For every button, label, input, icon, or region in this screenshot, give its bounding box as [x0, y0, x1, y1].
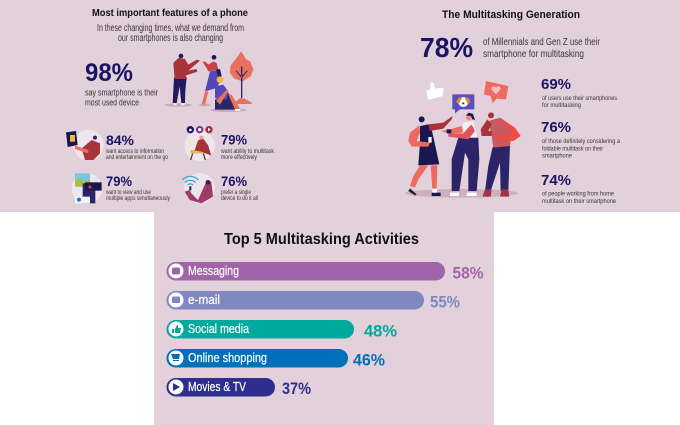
stat: 74%	[541, 172, 616, 205]
heading: features: Most important features of a phone	[92, 7, 248, 19]
bar: online shopping: Online shopping	[188, 350, 267, 365]
panel: the multitasking generation	[405, 9, 620, 205]
heading: generation: The Multitasking Generation	[442, 9, 580, 21]
stat: 69%: 69%	[541, 76, 571, 93]
bar: movies and TV	[166, 378, 311, 398]
stat: 78%: of Millennials and Gen Z use their	[483, 36, 600, 48]
bar: e-mail	[166, 291, 460, 312]
bar: social media	[166, 320, 397, 340]
panel: most important features of a phone	[66, 7, 275, 204]
stat: 79% ability: want ability to multitask	[220, 149, 275, 155]
top background panel	[0, 0, 680, 212]
bar: online shopping: 46%	[353, 351, 385, 369]
bar: messaging	[166, 262, 484, 283]
stat: 79% apps	[72, 173, 170, 204]
stat: 79% apps: multiple apps simultaneously	[106, 196, 170, 202]
bar: e-mail: 55%	[430, 294, 460, 312]
intro text: our smartphones is also changing	[118, 33, 223, 44]
woman with ponytail	[441, 113, 479, 196]
illustration: friends and tree	[164, 51, 253, 112]
panel: top 5 multitasking activities	[166, 231, 484, 398]
stat: 79% ability: more effectively	[221, 155, 257, 161]
icon: thumbs up	[426, 82, 443, 100]
icon: dog bubble	[452, 94, 474, 113]
stat: 69%	[541, 76, 618, 109]
bar: e-mail: e-mail	[188, 292, 220, 307]
stat: 79% apps: want to view and use	[105, 190, 152, 196]
stat: 79% apps: 79%	[106, 173, 133, 189]
bottom background panel	[154, 212, 494, 425]
stat: 74%: multitask on their smartphone	[542, 198, 616, 205]
stat: 69%: of users use their smartphones	[542, 95, 618, 102]
stat: 76% device: 76%	[221, 173, 248, 189]
stat: 84%: and entertainment on the go	[106, 155, 169, 161]
bar: social media: 48%	[364, 322, 397, 340]
stat: 74%: of people working from home	[542, 190, 614, 198]
intro text: In these changing times, what we demand from	[97, 23, 244, 34]
stat: 76%: smartphone	[542, 152, 572, 160]
woman in black dress	[408, 116, 453, 196]
bar: movies and TV: 37%	[282, 380, 311, 398]
stat: 84%	[66, 130, 169, 161]
bar: online shopping	[166, 349, 385, 369]
stat: 79% ability	[184, 126, 275, 161]
stat: 84%: want access to information	[105, 149, 164, 155]
stat: 74%: 74%	[541, 172, 571, 189]
stat: 98%: say smartphone is their	[85, 88, 158, 98]
stat: 84%: 84%	[106, 132, 135, 148]
illustration: three friends with social icons	[405, 81, 521, 198]
stat: 78%: 78%	[420, 32, 473, 63]
stat: 76%	[541, 119, 620, 160]
stat: 76% device: device to do it all	[221, 196, 258, 202]
man in pink sweater	[481, 112, 521, 197]
bar: messaging: Messaging	[188, 263, 239, 278]
stat: 78%	[420, 32, 600, 63]
bar: social media: Social media	[188, 321, 250, 336]
stat: 69%: for multitasking	[542, 102, 581, 109]
stat: 76%: of those definitely considering a	[542, 138, 620, 145]
stat: 98%	[85, 59, 158, 108]
stat: 78%: smartphone for multitasking	[483, 48, 584, 60]
stat: 79% ability: 79%	[221, 132, 248, 148]
icon: heart bubble	[484, 81, 508, 103]
bar: movies and TV: Movies & TV	[188, 379, 246, 394]
stat: 76%: foldable multitask on their	[542, 146, 604, 152]
heading: activities: Top 5 Multitasking Activities	[224, 231, 419, 248]
stat: 98%: most used device	[85, 98, 139, 108]
stat: 76%: 76%	[541, 119, 571, 136]
stat: 98%: 98%	[85, 59, 133, 87]
intro text	[97, 23, 244, 44]
stat: 76% device: prefer a single	[221, 190, 252, 196]
bar: messaging: 58%	[452, 265, 484, 283]
stat: 76% device	[182, 173, 258, 204]
